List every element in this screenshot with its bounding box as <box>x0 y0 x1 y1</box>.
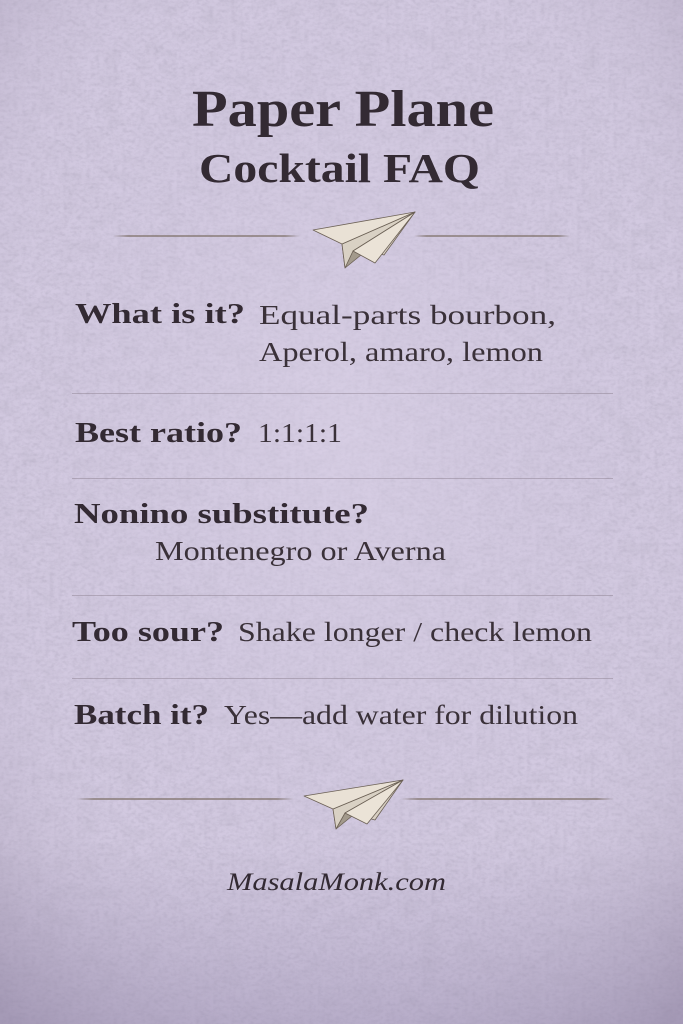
icon: paper plane top <box>313 212 415 268</box>
title: Cocktail FAQ <box>199 145 480 191</box>
faq row: what is it: Aperol, amaro, lemon <box>259 337 544 367</box>
faq row: best ratio: Best ratio? <box>75 417 242 449</box>
faq row: batch it: Batch it? <box>74 699 209 731</box>
title <box>192 81 494 191</box>
faq row: too sour <box>72 616 593 648</box>
faq row: nonino substitute <box>74 498 446 566</box>
faq row: best ratio <box>75 417 342 449</box>
faq row: too sour: Shake longer / check lemon <box>238 617 593 647</box>
bottom divider with paper plane <box>76 780 614 829</box>
faq row: nonino substitute: Montenegro or Averna <box>155 536 446 566</box>
title: Paper Plane <box>192 81 494 138</box>
faq row: what is it: What is it? <box>75 298 245 330</box>
faq row: batch it <box>74 699 579 731</box>
faq row: batch it: Yes—add water for dilution <box>224 700 579 730</box>
faq row: too sour: Too sour? <box>72 616 224 648</box>
faq row: what is it: Equal-parts bourbon, <box>259 300 556 330</box>
icon: paper plane bottom <box>304 780 403 829</box>
footer: website: MasalaMonk.com <box>226 869 446 896</box>
faq row: nonino substitute: Nonino substitute? <box>74 498 369 530</box>
faq row: best ratio: 1:1:1:1 <box>258 418 342 448</box>
faq row: what is it <box>75 298 556 367</box>
top divider with paper plane <box>113 212 570 268</box>
